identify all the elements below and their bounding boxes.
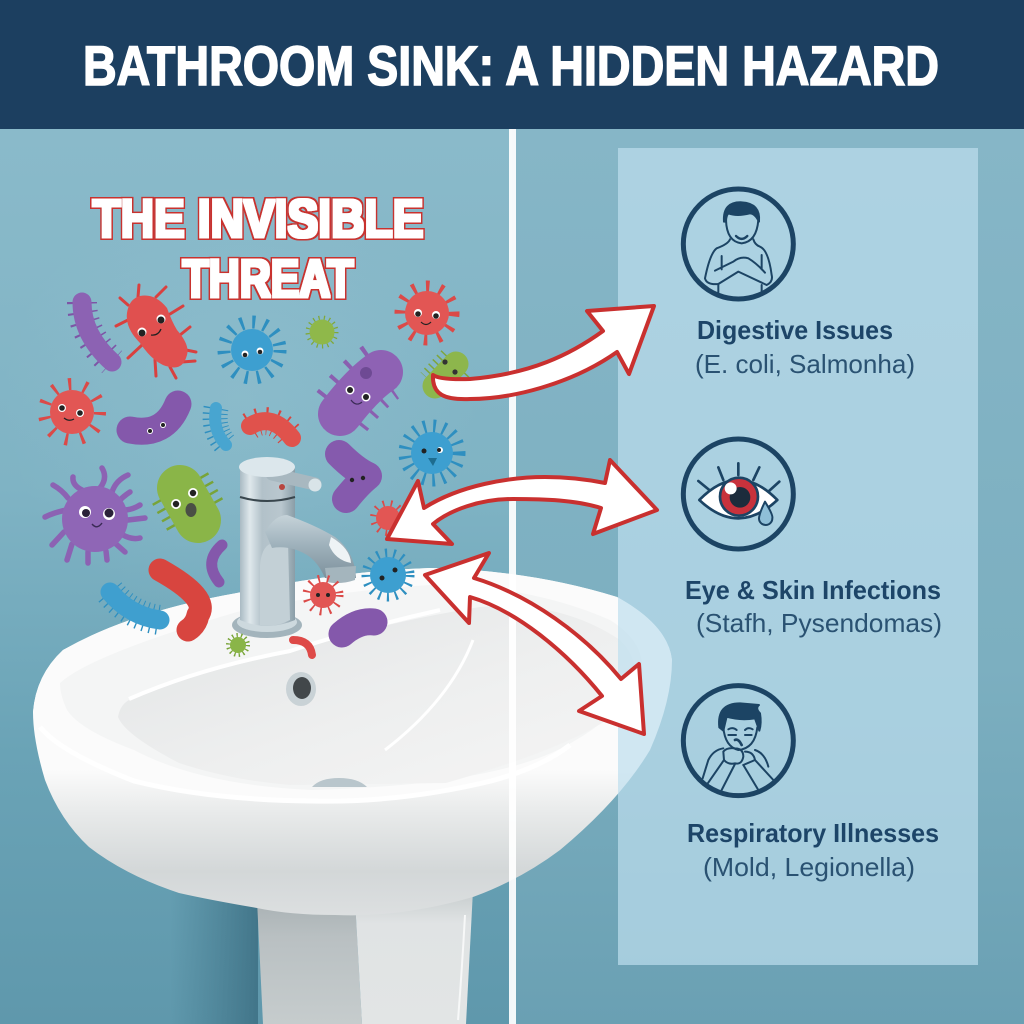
germ: blue spiky (224, 322, 280, 378)
arrow: germs to digestive issues (433, 306, 654, 399)
arrow: respiratory illnesses (425, 553, 644, 734)
germ: big purple (45, 468, 145, 563)
germ cluster (44, 285, 458, 655)
icon: stomach ache person (683, 189, 793, 299)
germ: red partly hidden (374, 504, 402, 532)
label: digestive issues: Digestive Issues (697, 315, 893, 345)
label: digestive issues: (E. coli, Salmonha) (695, 349, 915, 379)
germ: red kidney (116, 285, 196, 378)
arrow: eye and skin infections (387, 460, 657, 544)
germ: blue spiky by spout (367, 554, 409, 596)
germ: purple blob (340, 367, 381, 414)
header bar (0, 0, 1024, 129)
heading: the invisible threat (92, 189, 424, 309)
label: respiratory illnesses (687, 818, 939, 882)
bowl (118, 606, 635, 785)
faucet (232, 457, 356, 638)
icon: coughing person (683, 686, 793, 796)
panel: health effects (618, 148, 978, 965)
label: respiratory illnesses: Respiratory Illnesses (687, 818, 939, 848)
label: eye and skin infections: Eye & Skin Infections (685, 575, 941, 605)
germ: purple flat blob (342, 622, 374, 634)
label: digestive issues (695, 315, 915, 379)
germ: small green (308, 318, 336, 346)
germ: red long rod (160, 570, 200, 630)
germ: tiny green (228, 636, 248, 654)
germ: blue long rod (110, 592, 160, 620)
bottom drain (312, 778, 367, 787)
germ: red spiky left (44, 384, 100, 440)
basin outer (33, 568, 672, 915)
germ: purple dumbbell (339, 454, 368, 499)
germ: red worm (250, 421, 292, 438)
label: eye and skin infections: (Stafh, Pysendomas) (696, 608, 942, 638)
germ: green oval (171, 488, 198, 520)
germ: purple rod (82, 302, 112, 362)
germ: red spiky top right (400, 286, 454, 340)
overflow hole (286, 672, 316, 706)
basin top rim (33, 568, 672, 800)
germ: small purple rod (212, 545, 222, 582)
heading: the invisible threat: THREAT (182, 249, 354, 309)
divider line (509, 129, 516, 1024)
label: respiratory illnesses: (Mold, Legionella) (703, 852, 915, 882)
germ: small red spiky (307, 579, 339, 611)
sink (33, 568, 672, 1024)
label: eye and skin infections (685, 575, 942, 638)
germ: blue spiky right (406, 427, 458, 479)
inner rim (60, 585, 642, 790)
heading: the invisible threat: THE INVISIBLE (92, 189, 424, 249)
germ: purple banana (130, 404, 178, 434)
germ: green rod behind arrow (435, 359, 458, 386)
germ: tiny red worm (293, 640, 312, 655)
pedestal (257, 890, 473, 1024)
germ: blue rod (215, 408, 226, 445)
icon: infected eye (683, 439, 793, 549)
